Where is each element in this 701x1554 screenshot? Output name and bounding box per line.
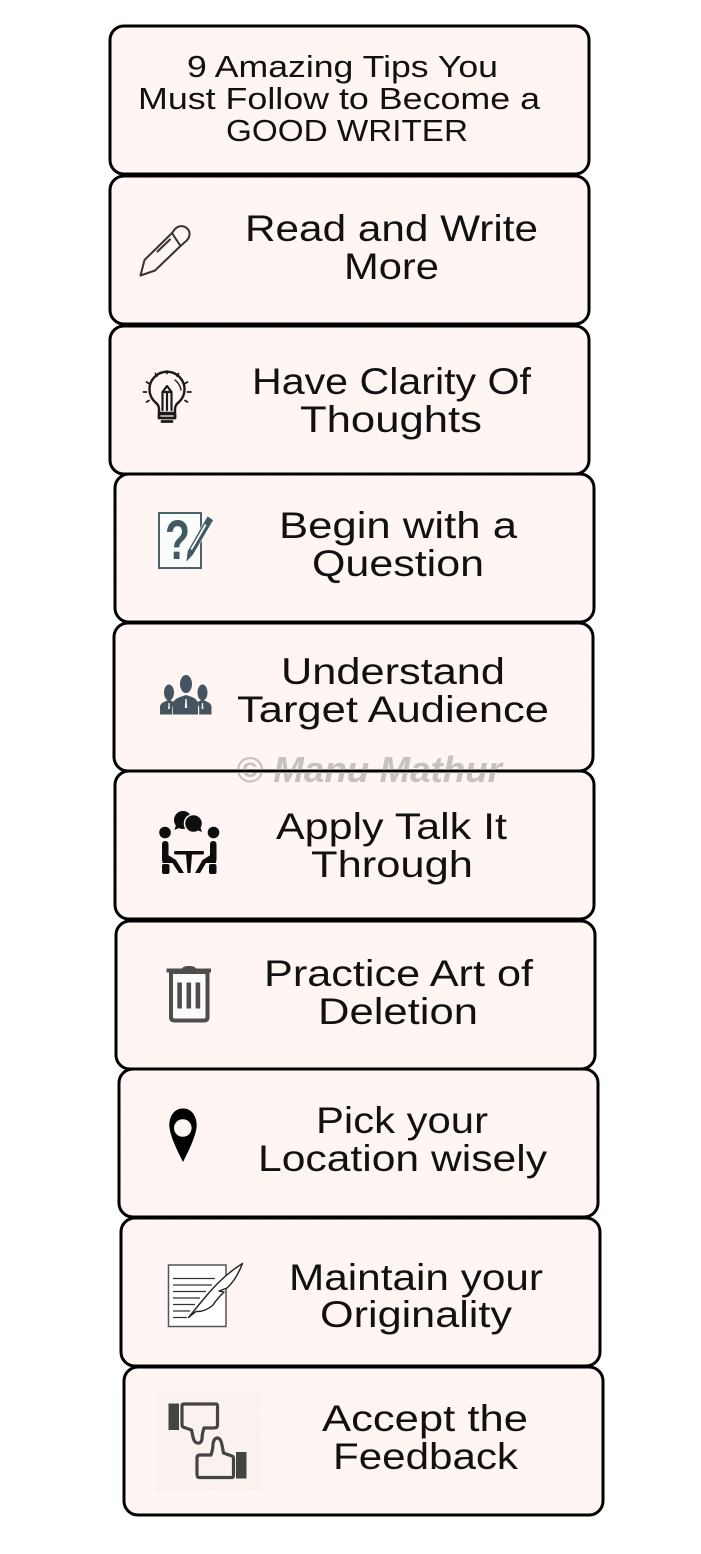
icon: two people talking at table: [159, 811, 219, 874]
icon: document and quill: [168, 1264, 242, 1326]
icon: light bulb with pencil: [144, 371, 191, 422]
icon: question mark and pen: [159, 508, 214, 571]
label: [322, 1398, 528, 1477]
label: Begin with a: [279, 505, 517, 546]
label: Practice Art of: [264, 953, 534, 994]
title text: 9 Amazing Tips You: [187, 49, 498, 84]
icon: location pin: [169, 1108, 197, 1162]
label: Understand: [281, 651, 505, 692]
label: [279, 505, 517, 584]
label: More: [344, 246, 439, 287]
panel: begin with a question: [115, 474, 594, 622]
panel: title: [110, 26, 589, 174]
label: Maintain your: [289, 1257, 543, 1298]
icon: question mark and pen: ?: [165, 508, 190, 571]
label: [264, 953, 534, 1032]
panel: accept the feedback: [124, 1367, 603, 1515]
panel: practice art of deletion: [116, 921, 595, 1069]
label: Read and Write: [245, 208, 538, 249]
icon: trash can: [166, 966, 211, 1020]
label: [245, 208, 538, 287]
panel: have clarity of thoughts: [110, 326, 589, 474]
icon: thumbs down and thumbs up: [156, 1392, 261, 1491]
label: Deletion: [318, 991, 478, 1032]
label: Thoughts: [300, 399, 482, 440]
label: Have Clarity Of: [252, 361, 532, 402]
label: Location wisely: [258, 1138, 548, 1179]
label: Originality: [320, 1294, 513, 1335]
label: Feedback: [333, 1436, 519, 1477]
label: [252, 361, 532, 440]
title text: GOOD WRITER: [226, 113, 468, 148]
panel: maintain your originality: [121, 1218, 600, 1366]
label: Question: [312, 543, 484, 584]
icon: pencil: [140, 226, 190, 276]
icon: group of people: [160, 675, 212, 714]
panel: pick your location wisely: [119, 1069, 598, 1217]
label: [289, 1257, 543, 1335]
label: Target Audience: [237, 689, 549, 730]
panel: apply talk it through: [115, 771, 594, 919]
watermark: © Manu Mathur: [236, 749, 504, 790]
title text: Must Follow to Become a: [138, 81, 541, 116]
label: Through: [311, 844, 473, 885]
label: Pick your: [316, 1100, 488, 1141]
label: [258, 1100, 548, 1179]
label: [237, 651, 549, 730]
title text: [138, 49, 541, 148]
label: Apply Talk It: [276, 806, 508, 847]
label: [276, 806, 508, 885]
label: Accept the: [322, 1398, 528, 1439]
panel: read and write more: [110, 176, 589, 324]
panel: understand target audience: [114, 623, 593, 771]
